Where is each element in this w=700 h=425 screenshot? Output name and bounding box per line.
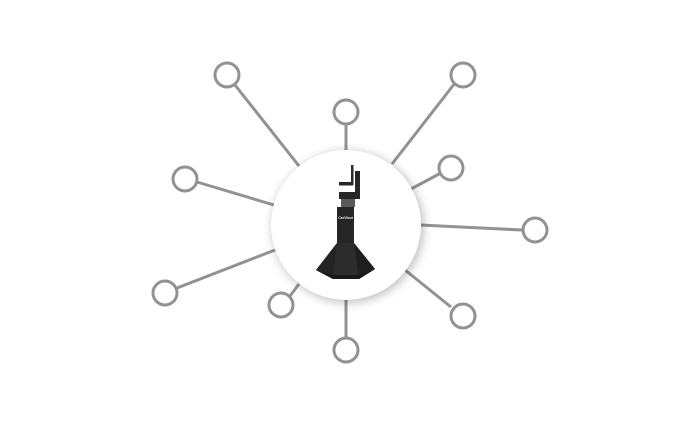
robot on pedestal	[316, 165, 375, 279]
pedestal label: CarVibot	[338, 216, 354, 220]
spokes	[177, 83, 522, 338]
node circles	[153, 63, 547, 362]
central circle	[271, 150, 423, 302]
